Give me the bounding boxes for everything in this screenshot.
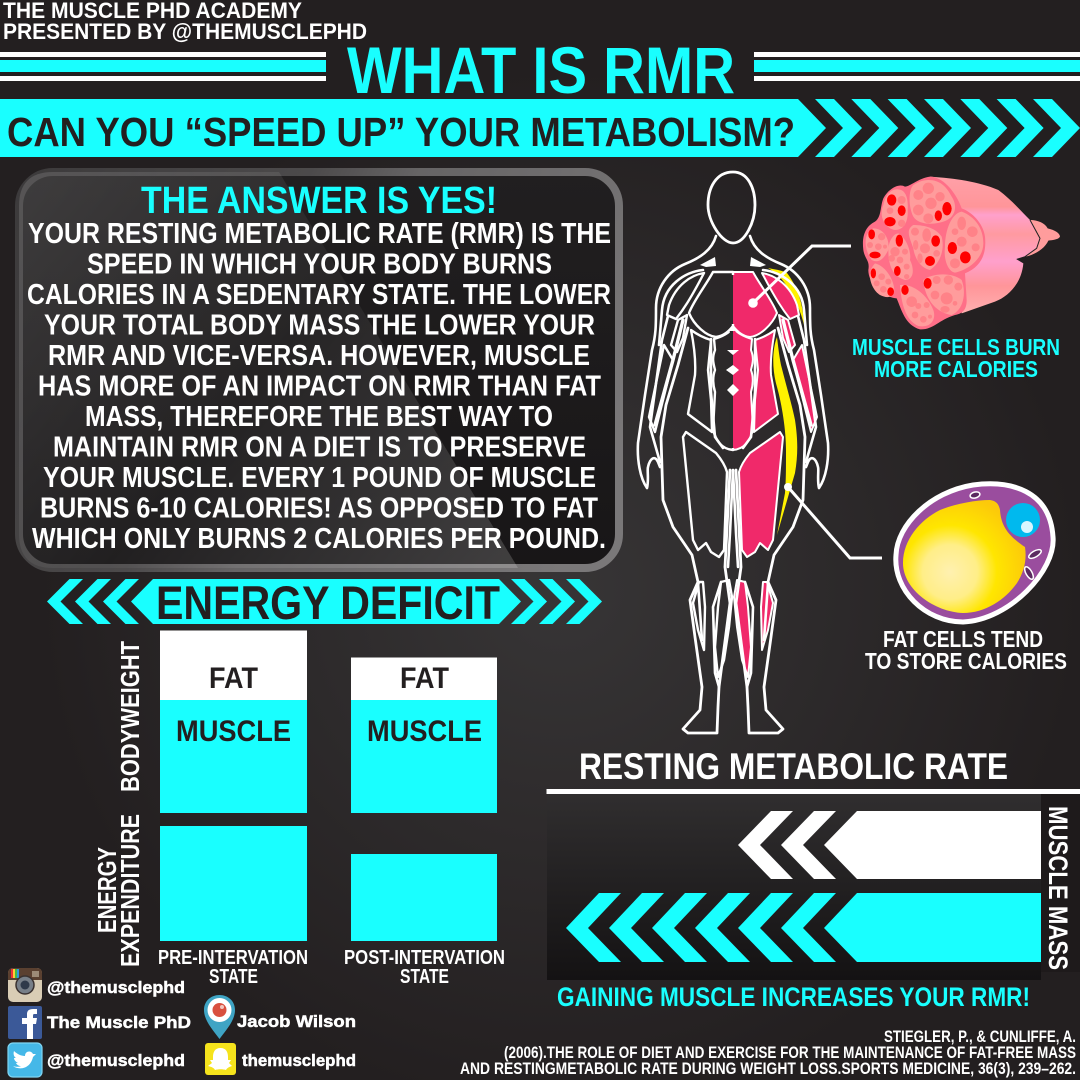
citation <box>460 1028 1076 1078</box>
label: fat cells <box>865 626 1067 674</box>
heading: resting metabolic rate: RESTING METABOLIC RATE <box>579 746 1008 787</box>
abdominal diamonds <box>726 350 739 396</box>
body text: RMR AND VICE-VERSA. HOWEVER, MUSCLE <box>48 340 590 372</box>
body text: HAS MORE OF AN IMPACT ON RMR THAN FAT <box>38 370 601 402</box>
body text: YOUR RESTING METABOLIC RATE (RMR) IS THE <box>28 218 611 250</box>
header credits <box>3 0 367 44</box>
axis label: energy expenditure: ENERGY <box>92 847 122 933</box>
body text: BURNS 6-10 CALORIES! AS OPPOSED TO FAT <box>40 492 598 524</box>
body text: SPEED IN WHICH YOUR BODY BURNS <box>87 248 552 280</box>
callout line: fat <box>784 483 882 558</box>
body text: YOUR MUSCLE. EVERY 1 POUND OF MUSCLE <box>43 462 596 494</box>
label: muscle cells <box>852 334 1060 382</box>
body text: YOUR TOTAL BODY MASS THE LOWER YOUR <box>44 310 595 342</box>
header credits: PRESENTED BY @THEMUSCLEPHD <box>3 19 367 44</box>
title rules left <box>0 52 326 81</box>
heading: the answer is yes: THE ANSWER IS YES! <box>141 180 497 222</box>
icon: twitter <box>8 1043 42 1077</box>
body text: CALORIES IN A SEDENTARY STATE. THE LOWER <box>27 279 611 311</box>
rmr chart <box>546 789 1080 980</box>
body text: MAINTAIN RMR ON A DIET IS TO PRESERVE <box>53 432 586 464</box>
column label: post-intervention <box>344 947 505 988</box>
banner arrow: can you speed up your metabolism <box>0 99 1080 157</box>
social handle: facebook: The Muscle PhD <box>47 1013 191 1032</box>
chart: pre-intervention energy expenditure bar <box>160 826 307 941</box>
label: fat cells: FAT CELLS TEND <box>883 626 1043 652</box>
muscle shapes <box>733 272 817 677</box>
chart: pre-intervention bodyweight bar: MUSCLE <box>176 715 291 748</box>
column label: post-intervention: POST-INTERVATION <box>344 947 505 969</box>
axis label: energy expenditure <box>92 814 145 967</box>
title rules right <box>754 52 1080 81</box>
chart: post-intervention bodyweight bar: MUSCLE <box>367 715 482 748</box>
icon: fat cell <box>896 484 1053 622</box>
head outline <box>708 172 755 243</box>
column label: pre-intervention: PRE-INTERVATION <box>158 947 308 969</box>
column label: post-intervention: STATE <box>400 966 449 988</box>
body text: MASS, THEREFORE THE BEST WAY TO <box>85 401 553 433</box>
chart: post-intervention bodyweight bar <box>351 658 497 813</box>
panel: the answer is yes <box>19 172 619 568</box>
icon: muscle fibre bundle <box>863 177 1060 329</box>
chart: pre-intervention bodyweight bar: FAT <box>209 662 258 695</box>
callout line: muscle <box>748 246 851 308</box>
left half line art <box>638 236 738 733</box>
chart: post-intervention energy expenditure bar <box>351 854 497 941</box>
chart: post-intervention bodyweight bar: FAT <box>400 662 449 695</box>
fat shapes <box>768 268 804 535</box>
banner arrow: can you speed up your metabolism: CAN YOU “SPEED UP” YOUR METABOLISM? <box>7 109 795 155</box>
axis label: muscle mass: MUSCLE MASS <box>1043 806 1073 970</box>
label: muscle cells: MORE CALORIES <box>874 356 1038 382</box>
social handle: periscope: Jacob Wilson <box>237 1012 356 1031</box>
high muscle arrow <box>566 893 1041 962</box>
body text: WHICH ONLY BURNS 2 CALORIES PER POUND. <box>32 523 606 555</box>
centre seam <box>730 275 735 448</box>
icon: snapchat <box>205 1043 236 1075</box>
energy deficit banner: ENERGY DEFICIT <box>156 576 500 629</box>
trapezius highlights <box>700 257 766 267</box>
left muscle outlines <box>649 272 733 677</box>
icon: periscope <box>204 995 235 1039</box>
icon: instagram <box>8 968 42 1002</box>
body figure <box>638 172 828 733</box>
column label: pre-intervention: STATE <box>209 966 258 988</box>
icon: facebook <box>8 1006 42 1039</box>
body text <box>27 218 611 555</box>
social handle: snapchat: themusclephd <box>242 1051 356 1070</box>
chart: pre-intervention bodyweight bar <box>160 630 307 813</box>
social handle: twitter: @themusclephd <box>47 1051 185 1070</box>
axis label: bodyweight: BODYWEIGHT <box>115 641 145 792</box>
column label: pre-intervention <box>158 947 308 988</box>
axis label: energy expenditure: EXPENDITURE <box>115 814 145 967</box>
title: WHAT IS RMR <box>347 33 735 107</box>
low muscle arrow <box>738 811 1041 879</box>
social handle: instagram: @themusclephd <box>47 978 185 997</box>
